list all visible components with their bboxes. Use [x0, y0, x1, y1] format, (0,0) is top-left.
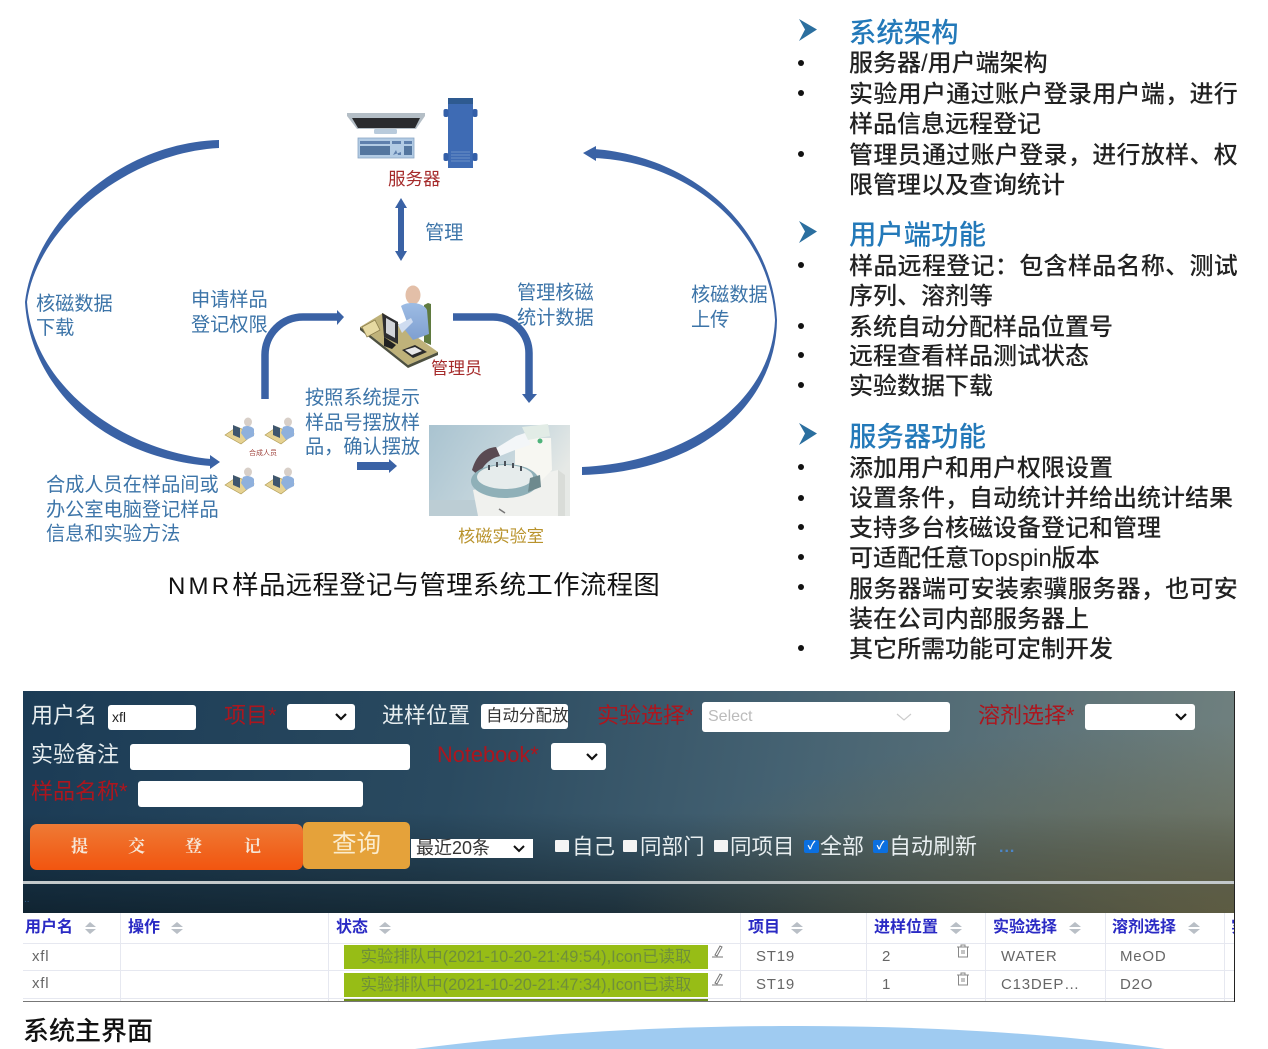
label: manage NMR statistics: 统计数据: [517, 308, 594, 328]
icon: chevron arrow: [799, 221, 817, 243]
text: administrator login: 限管理以及查询统计: [849, 172, 1065, 199]
status: queued 21:47:34: 实验排队中(2021-10-20-21:47:34),Icon已读取: [361, 976, 691, 994]
bullet: [798, 262, 804, 268]
heading: server features: 服务器功能: [849, 421, 986, 452]
select: notebook: [551, 743, 606, 770]
panel: system main interface background: [23, 691, 1235, 913]
bullet: [798, 60, 804, 66]
text: remote sample registration: [849, 253, 1238, 310]
label: auto refresh: 自动刷新: [889, 834, 977, 859]
text: administrator login: [849, 142, 1238, 199]
icon: staff member: [225, 418, 254, 444]
cell: position: 2: [882, 948, 891, 965]
select: experiment: Select: [708, 708, 752, 725]
decorative blue arc: [416, 1026, 1164, 1049]
cell: position: 1: [882, 976, 891, 993]
label: experiment note: 实验备注: [31, 742, 119, 767]
text: server deployment: 装在公司内部服务器上: [849, 606, 1089, 633]
checkbox: all: [804, 840, 819, 853]
input: sample position: [481, 704, 568, 729]
bullet: [798, 151, 804, 157]
image: NMR lab sample changer: [429, 424, 570, 516]
arrow: NMR data upload (right arc): [582, 146, 777, 475]
label: staff registers sample info: 办公室电脑登记样品: [46, 500, 219, 520]
caption: system main interface: 系统主界面: [23, 1016, 153, 1046]
label: NMR data upload: 核磁数据: [691, 285, 768, 306]
checkbox: all: ✓: [808, 840, 815, 852]
button: submit registration: 登: [185, 837, 202, 856]
label: NMR data download: 下载: [36, 318, 74, 339]
icon: synthesis staff group: [225, 418, 294, 494]
table header: project: 项目: [748, 919, 780, 936]
text: data download: 实验数据下载: [849, 372, 993, 400]
icon: server computer: [347, 113, 425, 158]
status: queued 21:49:54: 实验排队中(2021-10-20-21:49:54),Icon已读取: [361, 948, 691, 966]
icon: server tower: [444, 98, 478, 168]
label: staff registers sample info: 信息和实验方法: [46, 524, 180, 545]
label: sample position: 进样位置: [382, 703, 470, 728]
button: query: [303, 822, 410, 869]
status row 3 sliver: [344, 999, 708, 1001]
heading: system architecture: 系统架构: [849, 17, 959, 48]
text: remote sample registration: 样品远程登记：包含样品名称、测试: [849, 253, 1238, 280]
panel right border: [1234, 691, 1235, 1002]
label: staff registers sample info: [46, 474, 219, 545]
input: sample position: 自动分配放: [486, 707, 568, 725]
status: queued 21:49:54: [344, 945, 708, 969]
icon: delete trash: [957, 944, 969, 958]
table header: action: 操作: [128, 919, 160, 936]
select: project: [287, 704, 355, 730]
arrow: server management double arrow: [395, 198, 407, 261]
checkbox: auto refresh: [873, 840, 888, 853]
icon: edit pencil: [712, 973, 723, 986]
button: submit registration: 交: [128, 837, 145, 856]
text: conditional statistics: 设置条件，自动统计并给出统计结果: [849, 485, 1233, 512]
label: synthesis staff: 合成人员: [249, 450, 277, 457]
select: recent 20: 最近20条: [416, 838, 490, 858]
text: remote sample registration: 序列、溶剂等: [849, 283, 993, 310]
label: manage NMR statistics: [517, 282, 594, 328]
label: NMR data download: [36, 294, 113, 339]
text: custom development: 其它所需功能可定制开发: [849, 636, 1113, 663]
text: auto assign position: 系统自动分配样品位置号: [849, 314, 1113, 340]
status: queued 21:47:34: [344, 973, 708, 997]
text: server deployment: [849, 576, 1238, 633]
bullet: [798, 90, 804, 96]
link: more dots: ...: [999, 839, 1015, 856]
text: administrator login: 管理员通过账户登录，进行放样、权: [849, 142, 1238, 168]
text: user remote registration: 实验用户通过账户登录用户端，进行: [849, 80, 1238, 108]
table header: status: 状态: [336, 919, 368, 936]
cell: experiment: C13DEP…: [1001, 976, 1080, 993]
label: solvent choice: 溶剂选择*: [978, 703, 1075, 728]
icon: delete trash: [957, 972, 969, 986]
icon: staff member: [265, 468, 294, 494]
label: all: 全部: [820, 834, 864, 859]
sort icons: [85, 922, 1200, 934]
label: project: 项目*: [224, 703, 277, 728]
checkbox: same department: [623, 840, 637, 852]
divider bar: [23, 881, 1235, 884]
arrow: manage NMR statistics: [453, 317, 537, 403]
label: place samples per system prompt: 按照系统提示: [305, 388, 420, 409]
icon: edit pencil: [712, 945, 723, 958]
label: manage NMR statistics: 管理核磁: [517, 283, 594, 304]
label: server: 服务器: [388, 169, 440, 189]
button: query: 查询: [332, 831, 381, 858]
text: user remote registration: [849, 80, 1238, 138]
table header: position: 进样位置: [874, 919, 938, 936]
cell: project: ST19: [756, 976, 795, 993]
table: sample queue: [23, 913, 1235, 1002]
cell: username row 2: xfl: [32, 975, 49, 992]
label: experiment choice: 实验选择*: [597, 703, 694, 728]
text: user remote registration: 样品信息远程登记: [849, 111, 1041, 138]
text: multi-device support: 支持多台核磁设备登记和管理: [849, 514, 1161, 542]
label: same department: 同部门: [640, 835, 705, 859]
label: sample name: 样品名称*: [31, 779, 128, 804]
label: administrator: 管理员: [431, 359, 482, 378]
label: NMR data download: 核磁数据: [36, 294, 113, 315]
label: place samples per system prompt: 品，确认摆放: [305, 437, 420, 458]
label: NMR data upload: 上传: [691, 310, 729, 330]
icon: administrator at desk: [360, 286, 438, 368]
text: add users and permissions: 添加用户和用户权限设置: [849, 454, 1113, 482]
heading: client features: 用户端功能: [849, 219, 986, 250]
text: remote status check: 远程查看样品测试状态: [849, 342, 1089, 370]
arrow: NMR data download (left arc): [25, 140, 220, 469]
button: submit registration: 提: [71, 837, 88, 856]
input: sample name: [138, 781, 363, 807]
label: apply registration rights: 登记权限: [191, 314, 268, 336]
table header: experiment: 实验选择: [993, 919, 1057, 936]
bullet: [798, 382, 804, 388]
select: experiment: [702, 702, 950, 732]
checkbox: self: [555, 840, 569, 852]
text: server deployment: 服务器端可安装索骥服务器，也可安: [849, 576, 1238, 602]
label: place samples per system prompt: 样品号摆放样: [305, 412, 420, 434]
label: notebook: Notebook*: [437, 742, 539, 767]
bullet: [798, 645, 804, 651]
select: solvent: [1085, 704, 1195, 730]
bullet: [798, 323, 804, 329]
label: apply registration rights: [191, 290, 268, 336]
label: same project: 同项目: [730, 835, 795, 859]
text: server client architecture: 服务器/用户端架构: [849, 50, 1048, 77]
icon: chevron arrow: [799, 423, 817, 445]
arrow: place sample: [357, 459, 397, 473]
icon: chevron arrow: [799, 19, 817, 41]
cell: experiment: WATER: [1001, 948, 1058, 965]
button: submit registration: 记: [244, 837, 261, 856]
label: NMR data upload: [691, 284, 768, 330]
bullet: [798, 495, 804, 501]
cell: username row 1: xfl: [32, 948, 49, 965]
bullet: [798, 352, 804, 358]
table header: username: 用户名: [25, 919, 73, 936]
bullet: [798, 464, 804, 470]
button: submit registration: [30, 824, 303, 870]
bullet: [798, 524, 804, 530]
label: manage: 管理: [425, 223, 463, 244]
input: username: xfl: [112, 709, 126, 725]
label: place samples per system prompt: [305, 388, 420, 458]
checkbox: same project: [714, 840, 728, 852]
cell: solvent: D2O: [1120, 976, 1153, 993]
label: apply registration rights: 申请样品: [191, 290, 268, 311]
input: username: [108, 705, 196, 730]
link: small dots: ..: [24, 894, 30, 905]
cell: project: ST19: [756, 948, 795, 965]
arrow: apply for registration rights: [265, 310, 344, 399]
cell: solvent: MeOD: [1120, 948, 1167, 965]
workflow diagram arrows and icons: [25, 98, 777, 516]
label: staff registers sample info: 合成人员在样品间或: [46, 475, 219, 496]
text: Topspin compatibility: 可适配任意Topspin版本: [849, 545, 1100, 572]
label: username: 用户名: [31, 703, 97, 728]
icon: staff member: [225, 468, 254, 494]
label: self: 自己: [572, 835, 615, 859]
label: NMR lab: 核磁实验室: [458, 526, 544, 546]
caption: workflow diagram: NMR样品远程登记与管理系统工作流程图: [168, 570, 660, 600]
icon: staff member: [265, 418, 294, 444]
checkbox: auto refresh: ✓: [877, 840, 884, 852]
table header: solvent: 溶剂选择: [1112, 919, 1176, 936]
bullet: [798, 584, 804, 590]
input: experiment note: [130, 744, 410, 770]
bullet: [798, 554, 804, 560]
select: recent 20: [411, 839, 533, 858]
